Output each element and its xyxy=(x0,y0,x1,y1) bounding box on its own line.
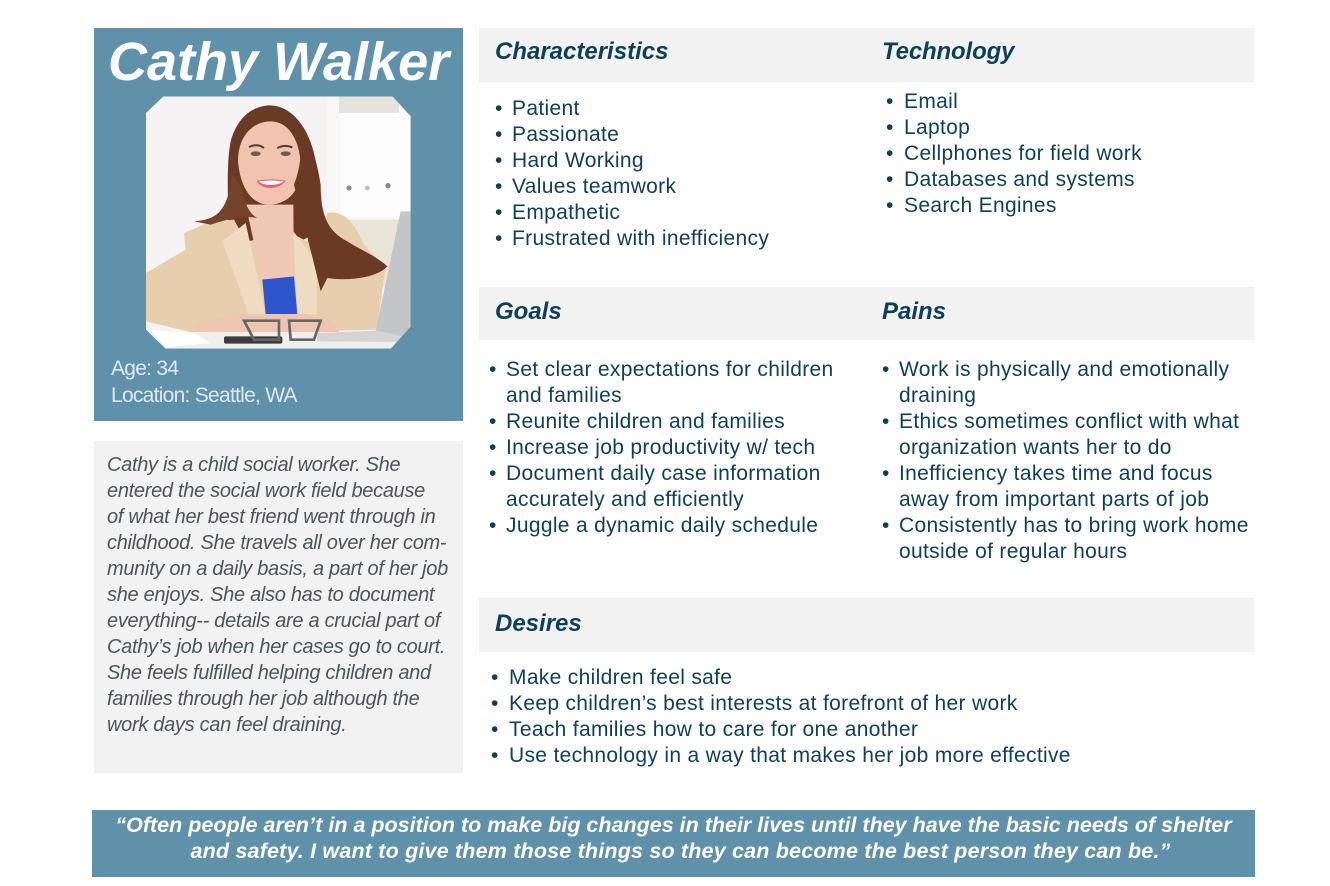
list: goals: Document daily case information xyxy=(506,462,821,485)
panel: characteristics and technology header xyxy=(479,28,1254,82)
heading: pains: Pains xyxy=(882,298,946,325)
panel: profile card xyxy=(94,28,463,421)
list: pains: Ethics sometimes conflict with what xyxy=(899,410,1239,433)
list: desires: Teach families how to care for one another xyxy=(509,718,918,741)
list: goals: Set clear expectations for children xyxy=(506,358,834,381)
list: goals: Reunite children and families xyxy=(506,410,785,433)
list: goals xyxy=(489,358,834,537)
list: goals: • xyxy=(489,410,497,433)
list: desires: • xyxy=(491,692,499,715)
list: pains: organization wants her to do xyxy=(899,436,1172,459)
list: pains: Work is physically and emotionally xyxy=(899,358,1229,381)
list: pains: • xyxy=(882,514,890,537)
list: desires: • xyxy=(491,666,499,689)
list: pains: • xyxy=(882,410,890,433)
list: goals: and families xyxy=(506,384,622,407)
list: desires: Use technology in a way that makes her job more effective xyxy=(509,744,1071,767)
list: characteristics: Frustrated with inefficiency xyxy=(512,227,769,250)
heading: technology: Technology xyxy=(882,38,1014,65)
list: pains: draining xyxy=(899,384,976,407)
list: characteristics: Hard Working xyxy=(512,149,644,172)
list: characteristics: Empathetic xyxy=(512,201,620,224)
list: technology xyxy=(886,90,1142,217)
list: characteristics: Passionate xyxy=(512,123,619,146)
panel: goals and pains header xyxy=(479,287,1254,340)
list: technology: • xyxy=(886,194,894,217)
list: technology: Search Engines xyxy=(904,194,1057,217)
list: pains: Consistently has to bring work home xyxy=(899,514,1249,537)
list: goals: accurately and efficiently xyxy=(506,488,744,511)
list: characteristics: • xyxy=(495,149,503,172)
list: goals: • xyxy=(489,358,497,381)
quote banner xyxy=(92,810,1255,877)
list: characteristics: Patient xyxy=(512,97,580,120)
list: pains: outside of regular hours xyxy=(899,540,1127,563)
list: goals: • xyxy=(489,462,497,485)
list: desires: Make children feel safe xyxy=(509,666,732,689)
list: characteristics: • xyxy=(495,175,503,198)
list: desires xyxy=(491,666,1071,767)
list: technology: Cellphones for field work xyxy=(904,142,1142,165)
list: technology: Databases and systems xyxy=(904,168,1135,191)
list: pains: • xyxy=(882,358,890,381)
list: technology: • xyxy=(886,142,894,165)
list: pains: away from important parts of job xyxy=(899,488,1209,511)
list: goals: Increase job productivity w/ tech xyxy=(506,436,815,459)
list: technology: Laptop xyxy=(904,116,970,139)
list: goals: • xyxy=(489,436,497,459)
list: desires: • xyxy=(491,718,499,741)
list: pains: • xyxy=(882,462,890,485)
list: technology: • xyxy=(886,168,894,191)
heading: desires: Desires xyxy=(495,610,582,637)
panel: desires header xyxy=(479,598,1254,652)
list: desires: • xyxy=(491,744,499,767)
list: technology: Email xyxy=(904,90,958,113)
list: technology: • xyxy=(886,90,894,113)
list: characteristics: • xyxy=(495,227,503,250)
title: persona name: Cathy Walker xyxy=(108,32,449,92)
portrait photo xyxy=(146,96,411,349)
list: goals: • xyxy=(489,514,497,537)
profile details: Age: 34 Location: Seattle, WA xyxy=(111,357,297,407)
list: characteristics: Values teamwork xyxy=(512,175,676,198)
quote banner: “Often people aren’t in a position to make big changes in their lives until they have the basic needs of shelter xyxy=(115,813,1232,837)
heading: goals: Goals xyxy=(495,298,562,325)
list: desires: Keep children’s best interests at forefront of her work xyxy=(509,692,1018,715)
list: characteristics: • xyxy=(495,201,503,224)
list: pains: Inefficiency takes time and focus xyxy=(899,462,1213,485)
list: technology: • xyxy=(886,116,894,139)
quote banner: and safety. I want to give them those things so they can become the best person they can be.” xyxy=(190,839,1171,863)
list: characteristics: • xyxy=(495,123,503,146)
panel: biography xyxy=(94,441,463,773)
biography text: Cathy is a child social worker. She entered the social work field because of what her best friend went through in childhood. She travels all over her com- munity on a daily basis, a part of her job she enjoys. She also has to document everything-- details are a crucial part of Cathy’s job when her cases go to court. She feels fulfilled helping children and families through her job although the work days can feel draining. xyxy=(107,454,448,736)
heading: characteristics: Characteristics xyxy=(495,38,668,65)
list: characteristics xyxy=(495,97,769,250)
list: characteristics: • xyxy=(495,97,503,120)
list: goals: Juggle a dynamic daily schedule xyxy=(506,514,818,537)
list: pains xyxy=(882,358,1249,563)
